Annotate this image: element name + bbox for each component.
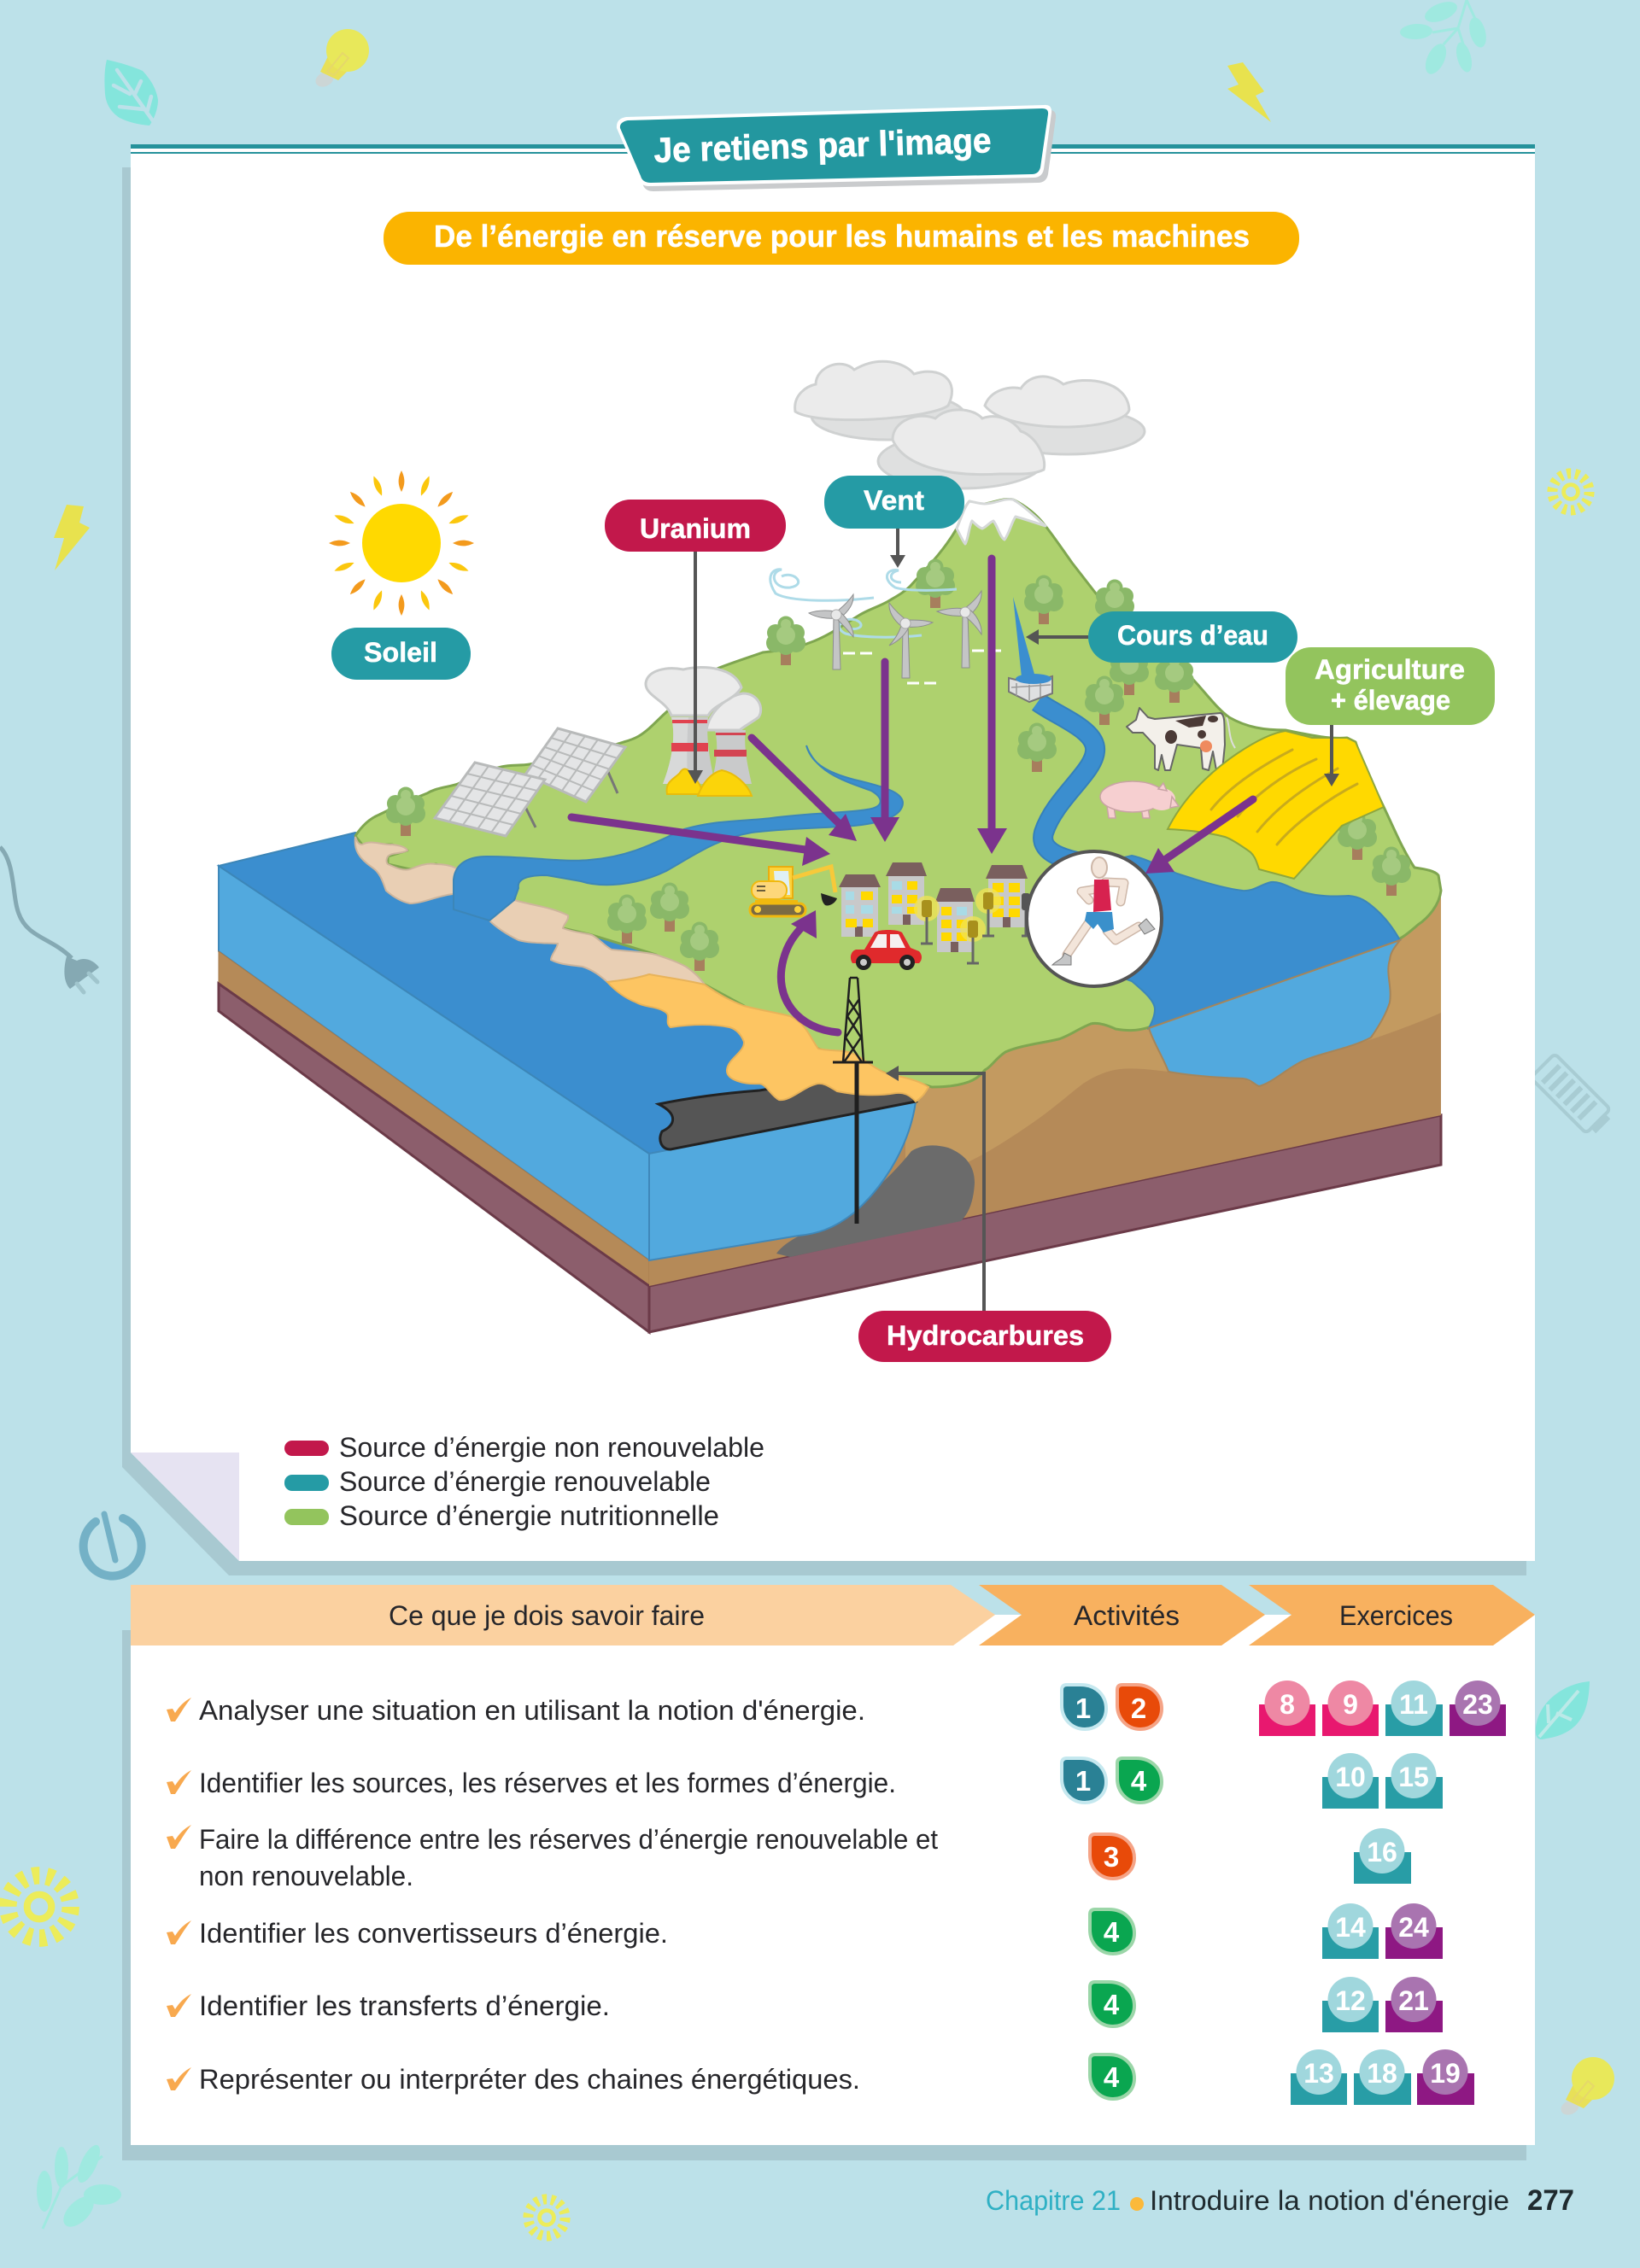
legend: Source d’énergie non renouvelable [339, 1432, 764, 1463]
icons: street lamps [914, 888, 1030, 963]
row 1 exercises: 8 [1280, 1689, 1295, 1720]
icon: leaf right [1536, 1681, 1590, 1739]
land surface [355, 500, 1441, 1087]
label: Hydrocarbures with arrow [858, 1066, 1111, 1362]
header: exercices [1249, 1585, 1535, 1645]
header: activités: Activités [1074, 1600, 1180, 1631]
row 4 exercises [1322, 1903, 1443, 1959]
exercise badges [1259, 1681, 1506, 2105]
sand [607, 974, 928, 1102]
right face soil dark [649, 905, 1441, 1286]
label: Vent with arrow [824, 476, 964, 568]
panel: image recap [122, 144, 1535, 1575]
icon: oil derrick and pipe [833, 978, 873, 1224]
purple energy arrows [571, 558, 1253, 1032]
icon: leaf top left [104, 60, 158, 126]
legend [284, 1432, 764, 1531]
skill list: Faire la différence entre les réserves d’énergie renouvelable et [199, 1824, 938, 1855]
activity badges: 1 [1075, 1765, 1091, 1797]
row 5 exercises: 21 [1398, 1985, 1429, 2016]
sea front face [649, 1102, 916, 1260]
icon: car [851, 930, 922, 970]
title tab: Je retiens par l'image [653, 120, 992, 170]
legend: Source d’énergie renouvelable [339, 1466, 711, 1497]
right face soil light [905, 889, 1441, 1195]
beach left [355, 837, 458, 903]
skill list: Représenter ou interpréter des chaines énergétiques. [199, 2064, 860, 2095]
snowcap [957, 500, 1046, 544]
skill list: Analyser une situation en utilisant la notion d'énergie. [199, 1695, 865, 1726]
row 1 exercises [1259, 1681, 1506, 1736]
label: Agriculture + élevage with arrow [1286, 647, 1495, 786]
activity badges: 4 [1104, 1916, 1120, 1948]
lake surface [1102, 856, 1400, 1028]
label: Hydrocarbures with arrow: Hydrocarbures [887, 1320, 1084, 1351]
heading: yellow banner [384, 212, 1299, 265]
icon: branch top right [1400, 0, 1489, 77]
diagram: landscape block [219, 361, 1495, 1362]
row 2 exercises [1322, 1753, 1443, 1809]
label: Agriculture + élevage with arrow: + élevage [1331, 685, 1450, 716]
icon: lightning left [54, 505, 90, 570]
panel: skills table [122, 1585, 1535, 2160]
activity badges [1062, 1685, 1162, 2099]
right face bedrock [649, 1115, 1441, 1332]
row 6 exercises [1291, 2049, 1474, 2105]
white sheet [131, 149, 1535, 1561]
top double rule [131, 144, 1535, 154]
icons: wind turbines [809, 591, 1004, 683]
header: savoir faire [131, 1585, 995, 1645]
icon: sun left [8, 1875, 71, 1938]
folded corner [131, 1453, 239, 1561]
icon: uranium piles [667, 769, 752, 796]
row 2 exercises: 10 [1335, 1762, 1366, 1792]
skill list: Identifier les sources, les réserves et les formes d’énergie. [199, 1768, 896, 1798]
left face water [219, 866, 649, 1260]
activity badges: 4 [1104, 1989, 1120, 2020]
skill list: Identifier les convertisseurs d’énergie. [199, 1918, 668, 1949]
legend: Source d’énergie nutritionnelle [339, 1500, 719, 1531]
label: Agriculture + élevage with arrow: Agriculture [1315, 654, 1465, 685]
table sheet [131, 1615, 1535, 2145]
skill list [167, 1695, 938, 2095]
icon: lightning top [1227, 62, 1271, 122]
icon: excavator [750, 867, 837, 916]
icon: battery [1531, 1054, 1614, 1137]
header: activités [979, 1585, 1265, 1645]
header: exercices: Exercices [1339, 1600, 1453, 1631]
clouds [795, 361, 1145, 488]
icon: nuclear plant [646, 668, 761, 784]
icon: wheat field [1168, 731, 1384, 879]
row 5 exercises: 12 [1335, 1985, 1366, 2016]
icon: solar panels [435, 728, 625, 836]
activity badges: 2 [1131, 1692, 1146, 1724]
label: Cours d'eau with arrow: Cours d’eau [1117, 620, 1268, 651]
row 1 exercises: 9 [1343, 1689, 1358, 1720]
row 6 exercises: 18 [1367, 2058, 1397, 2089]
label: Uranium with arrow: Uranium [640, 513, 751, 544]
footer: Introduire la notion d'énergie [1150, 2185, 1509, 2216]
row 2 exercises: 15 [1398, 1762, 1429, 1792]
icon: branch bottom left [37, 2142, 121, 2232]
row 6 exercises: 13 [1303, 2058, 1334, 2089]
icon: sun right [1552, 473, 1590, 511]
skill list: Identifier les transferts d’énergie. [199, 1990, 610, 2021]
row 3 exercises [1354, 1828, 1411, 1884]
activity badges: 3 [1104, 1841, 1119, 1873]
oil slick [659, 1078, 916, 1149]
river left [454, 745, 903, 921]
icon: plug and cable [0, 847, 99, 992]
row 5 exercises [1322, 1977, 1443, 2032]
icon: bulb top [313, 29, 369, 90]
beach centre [489, 900, 705, 985]
hydrocarbon reservoir [776, 1145, 975, 1257]
label: Uranium with arrow [605, 500, 786, 784]
icon: power button [84, 1514, 142, 1576]
table shadow [122, 1630, 1526, 2160]
lake front [1149, 940, 1400, 1086]
activity badges: 4 [1131, 1765, 1147, 1797]
icon: pig [1100, 781, 1179, 818]
label: Soleil [331, 628, 471, 680]
left face bedrock [219, 984, 649, 1332]
row 4 exercises: 24 [1398, 1912, 1429, 1943]
icon: cow [1127, 708, 1235, 770]
icon: sun [329, 471, 474, 616]
label: Vent with arrow: Vent [864, 485, 924, 516]
footer: Chapitre 21 [986, 2185, 1121, 2216]
panel shadow [122, 167, 1526, 1575]
icon: bulb bottom right [1559, 2057, 1614, 2118]
river right [1038, 702, 1110, 867]
row 6 exercises: 19 [1430, 2058, 1461, 2089]
sea surface [219, 833, 916, 1154]
left face soil [219, 951, 649, 1286]
row 1 exercises: 23 [1462, 1689, 1493, 1720]
skill list: non renouvelable. [199, 1861, 413, 1891]
heading: yellow banner: De l’énergie en réserve pour les humains et les machines [434, 219, 1250, 254]
icons: trees [386, 558, 1411, 971]
header: savoir faire: Ce que je dois savoir faire [389, 1600, 705, 1631]
row 3 exercises: 16 [1367, 1837, 1397, 1868]
icons: buildings [839, 862, 1028, 952]
row 1 exercises: 11 [1399, 1689, 1428, 1720]
row 4 exercises: 14 [1335, 1912, 1366, 1943]
icon: runner medallion [1027, 851, 1162, 986]
activity badges: 1 [1075, 1692, 1091, 1724]
footer: 277 [1527, 2184, 1574, 2217]
label: Cours d'eau with arrow [1026, 611, 1297, 663]
icon: sun bottom [528, 2199, 565, 2236]
wind swirls [770, 570, 957, 637]
footer [986, 2184, 1574, 2217]
label: Soleil: Soleil [364, 637, 437, 668]
title tab [617, 105, 1056, 191]
activity badges: 4 [1104, 2061, 1120, 2093]
icon: waterfall and dam [1009, 597, 1052, 702]
